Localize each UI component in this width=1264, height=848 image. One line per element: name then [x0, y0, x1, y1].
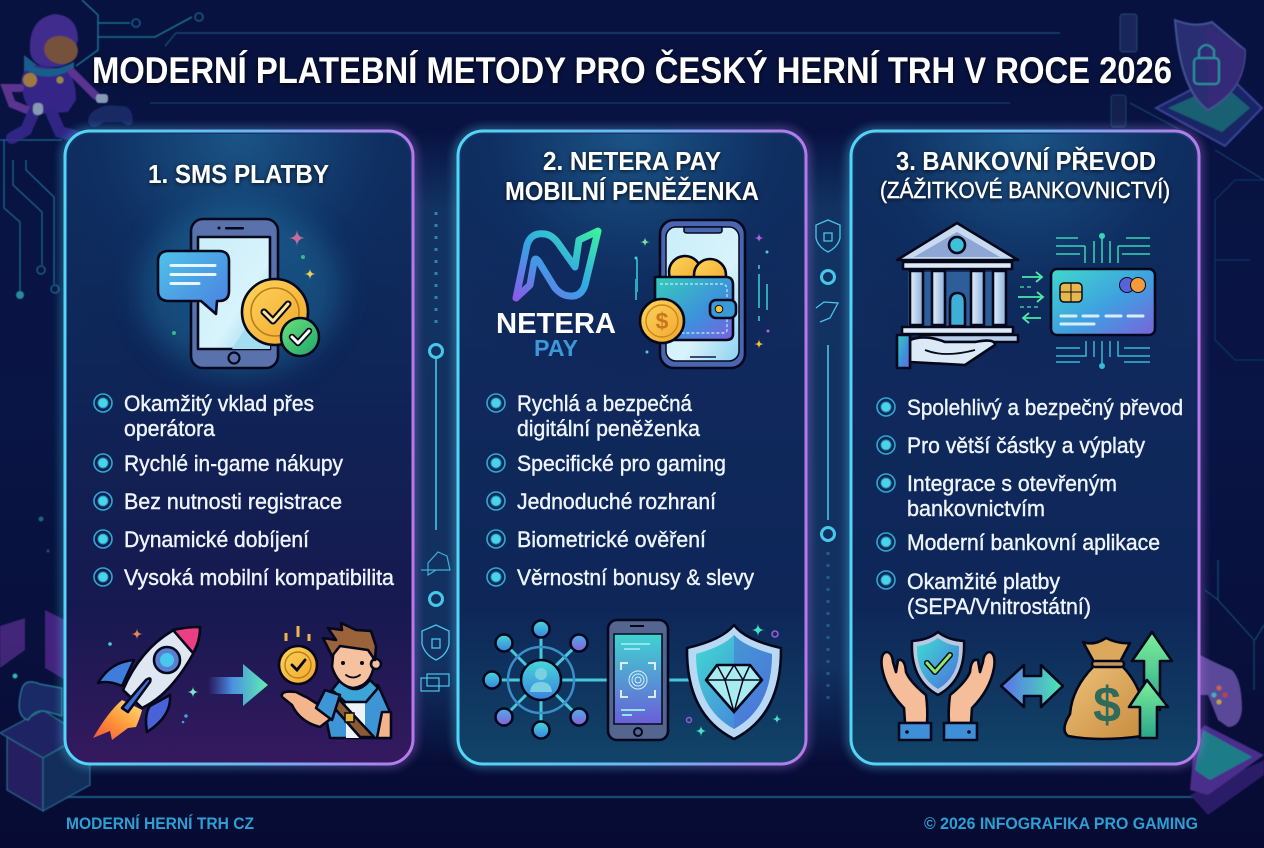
- icon: hands with shield: [882, 632, 994, 740]
- icon: phone with SMS bubble and coin: [140, 205, 340, 375]
- bullet list: Netera Pay: Biometrické ověření: [517, 527, 706, 552]
- icon: shield with diamond: [686, 623, 782, 739]
- heading: Bankovní převod: (ZÁŽITKOVÉ BANKOVNICTVÍ): [880, 177, 1170, 203]
- bullet list: Netera Pay: Jednoduché rozhraní: [517, 489, 716, 514]
- background icon: shield on platform: [1111, 14, 1262, 146]
- footer: copyright: © 2026 INFOGRAFIKA PRO GAMING: [924, 814, 1198, 833]
- bullet list: SMS platby: operátora: [124, 416, 216, 441]
- bullet list: Bankovní převod: Pro větší částky a výplaty: [907, 433, 1145, 458]
- footer: left label: MODERNÍ HERNÍ TRH CZ: [66, 814, 254, 833]
- bullet list: Bankovní převod: Integrace s otevřeným: [907, 471, 1117, 496]
- heading: Netera Pay: [505, 146, 759, 206]
- panel: Netera Pay: [458, 131, 806, 764]
- bullet list: SMS platby: Okamžitý vklad přes: [124, 391, 314, 416]
- connector: between panels 2 and 3: [816, 220, 840, 700]
- background icon: platform and controller right: [1190, 655, 1264, 815]
- bullet list: Netera Pay: Specifické pro gaming: [517, 451, 726, 476]
- bullet list: Bankovní převod: bankovnictvím: [907, 496, 1045, 521]
- bullet list: Bankovní převod: Okamžité platby: [907, 569, 1060, 594]
- heading: Bankovní převod: [880, 146, 1170, 203]
- icon: transfer arrows: [1018, 272, 1043, 323]
- heading: Netera Pay: MOBILNÍ PENĚŽENKA: [505, 176, 759, 206]
- bullet list: Bankovní převod: (SEPA/Vnitrostátní): [907, 594, 1091, 619]
- logo: Netera Pay: PAY: [534, 335, 578, 361]
- icon: payment card with circuits: [1051, 233, 1155, 369]
- icon: network node: [484, 620, 610, 738]
- background icon: astronaut with controller: [6, 14, 133, 140]
- icon: phone with fingerprint: [608, 620, 690, 740]
- bullet list: Netera Pay: Věrnostní bonusy & slevy: [517, 565, 754, 590]
- bullet list: SMS platby: Vysoká mobilní kompatibilita: [124, 565, 395, 590]
- icon: rocket: [93, 627, 200, 740]
- bullet list: Bankovní převod: [877, 395, 1183, 619]
- panel: SMS platby: [65, 131, 413, 764]
- icon: money bag with growth arrows: $: [1093, 677, 1121, 733]
- bullet list: Bankovní převod: Moderní bankovní aplikace: [907, 530, 1160, 555]
- bullet list: SMS platby: Rychlé in-game nákupy: [124, 451, 343, 476]
- bullet list: Netera Pay: Rychlá a bezpečná: [517, 391, 693, 416]
- heading: Bankovní převod: 3. BANKOVNÍ PŘEVOD: [896, 146, 1156, 176]
- heading: Netera Pay: 2. NETERA PAY: [543, 146, 721, 176]
- icon: phone with wallet and coins: $: [656, 308, 669, 334]
- bullet list: SMS platby: Dynamické dobíjení: [124, 527, 309, 552]
- bullet list: SMS platby: Bez nutnosti registrace: [124, 489, 342, 514]
- icon: phone with wallet and coins: [634, 220, 770, 368]
- background icon: cubes and controller left: [0, 610, 90, 811]
- bullet list: Bankovní převod: Spolehlivý a bezpečný převod: [907, 395, 1183, 420]
- logo: Netera Pay: NETERA: [496, 308, 616, 340]
- icon: bank on hand: [897, 223, 1018, 368]
- logo: Netera Pay: [496, 231, 616, 361]
- arrow: rocket to player: [208, 664, 268, 706]
- bullet list: SMS platby: [94, 391, 395, 590]
- arrow: two-way exchange: [1001, 665, 1063, 707]
- panel gutters: [413, 131, 851, 764]
- bullet list: Netera Pay: [487, 391, 754, 590]
- bullet list: Netera Pay: digitální peněženka: [517, 416, 701, 441]
- icon: money bag with growth arrows: [1064, 632, 1172, 739]
- connector: between panels 1 and 2: [421, 212, 450, 691]
- panel: Bankovní převod: [851, 131, 1199, 764]
- icon: player with coin: [279, 623, 391, 738]
- heading: SMS platby: 1. SMS PLATBY: [148, 159, 329, 189]
